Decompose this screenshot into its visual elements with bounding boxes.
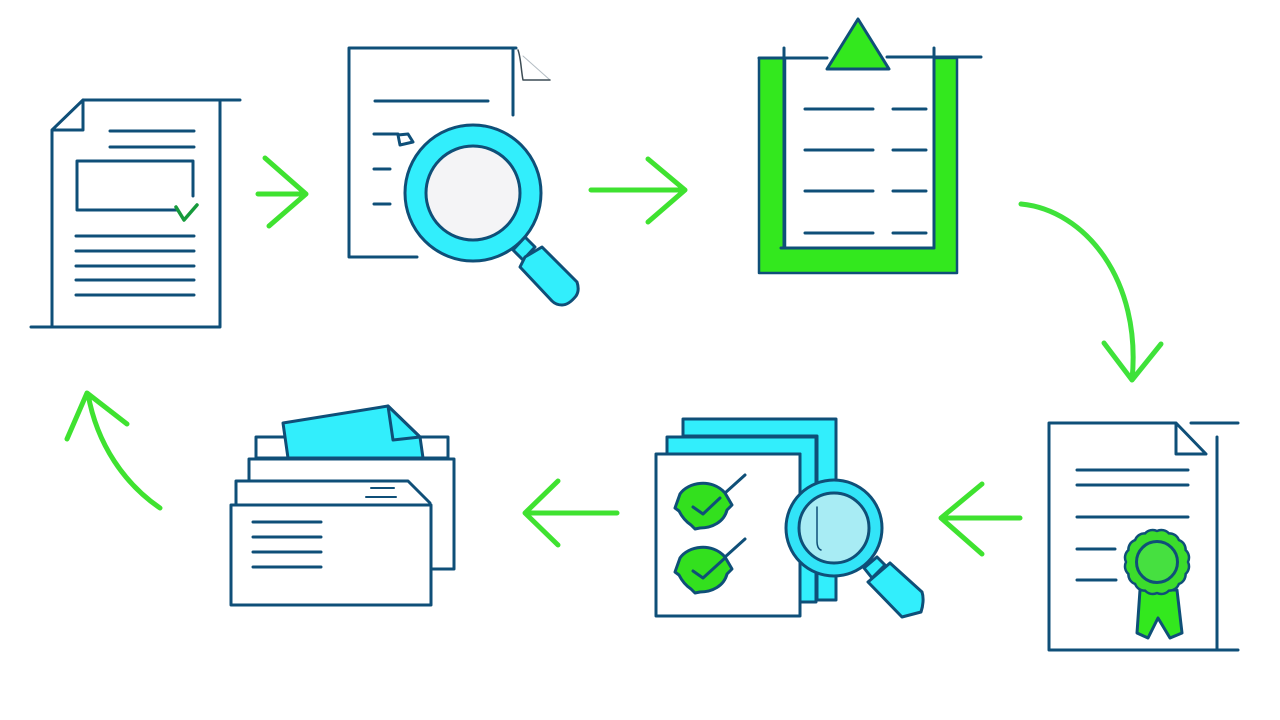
arrow: draft to review xyxy=(258,158,306,226)
arrow: certificate to verification xyxy=(941,484,1020,554)
icon: filed folders xyxy=(231,406,454,605)
arrow: archive back to draft xyxy=(67,393,160,508)
arrow: review to clipboard xyxy=(591,159,685,222)
icon: document under magnifying glass xyxy=(349,48,578,305)
arrow: verification to archive xyxy=(525,481,617,545)
arrow: clipboard to certificate xyxy=(1021,204,1161,380)
icon: green clipboard xyxy=(759,19,981,273)
icon: draft document with checkmark xyxy=(31,100,240,327)
icon: certified document with ribbon xyxy=(1049,423,1238,650)
icon: checklist with magnifying glass xyxy=(656,419,923,617)
